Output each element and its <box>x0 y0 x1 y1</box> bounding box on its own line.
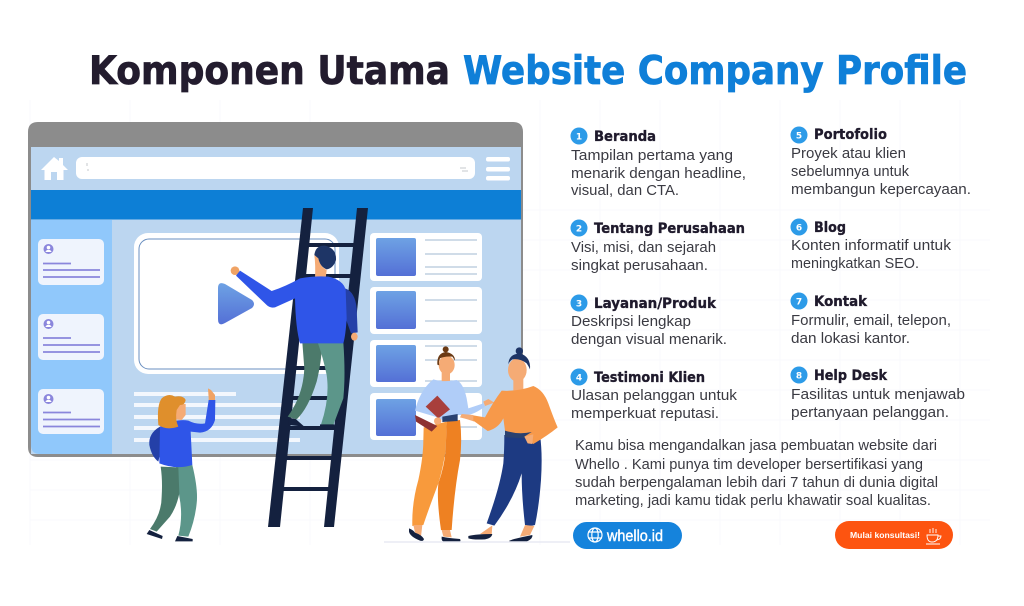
item 8: Help Desk: Fasilitas untuk menjawab <box>791 386 965 403</box>
title <box>89 49 967 94</box>
item 6: Blog: 6 <box>796 224 802 234</box>
item 4: Testimoni Klien: memperkuat reputasi. <box>571 405 719 422</box>
search bar <box>76 157 475 179</box>
button: Mulai konsultasi: Mulai konsultasi! <box>850 530 920 540</box>
icon: play <box>218 283 254 324</box>
item 4: Testimoni Klien: Testimoni Klien <box>594 370 705 386</box>
item 8: Help Desk: Help Desk <box>814 368 888 384</box>
woman with folder <box>409 346 494 542</box>
item 2: Tentang Perusahaan <box>570 220 745 274</box>
two women talking <box>409 346 558 542</box>
icon: menu <box>486 157 510 180</box>
item 6: Blog: Konten informatif untuk <box>791 237 952 254</box>
item 1: Beranda: 1 <box>576 132 582 142</box>
item 8: Help Desk: pertanyaan pelanggan. <box>791 404 949 421</box>
button: Mulai konsultasi <box>835 521 953 549</box>
icon: coffee cup <box>926 528 941 544</box>
ground line <box>384 541 570 543</box>
item 8: Help Desk: 8 <box>796 372 802 382</box>
button: whello.id: whello.id <box>606 528 663 545</box>
closing paragraph <box>575 438 938 509</box>
item 7: Kontak: dan lokasi kantor. <box>791 330 910 347</box>
item 5: Portofolio: Proyek atau klien <box>791 145 906 162</box>
item 5: Portofolio <box>790 126 971 198</box>
item 3: Layanan/Produk: Deskripsi lengkap <box>571 313 691 330</box>
woman pointing <box>147 388 215 541</box>
item 2: Tentang Perusahaan: Tentang Perusahaan <box>594 221 745 237</box>
item 5: Portofolio: Portofolio <box>814 127 887 143</box>
item 5: Portofolio: membangun kepercayaan. <box>791 181 971 198</box>
item 1: Beranda: Tampilan pertama yang <box>571 147 733 164</box>
item 7: Kontak: Kontak <box>814 294 868 310</box>
item 5: Portofolio: sebelumnya untuk <box>791 163 909 180</box>
item 1: Beranda: Beranda <box>594 129 656 145</box>
item 3: Layanan/Produk: dengan visual menarik. <box>571 331 727 348</box>
item 2: Tentang Perusahaan: Visi, misi, dan sejarah <box>571 239 716 256</box>
item 6: Blog: meningkatkan SEO. <box>791 255 919 272</box>
video player <box>134 233 339 374</box>
woman in orange <box>460 347 558 542</box>
title: Komponen Utama <box>89 49 450 94</box>
item 5: Portofolio: 5 <box>796 132 802 142</box>
title: Website Company Profile <box>463 49 967 94</box>
content cards <box>370 233 482 440</box>
closing paragraph: sudah berpengalaman lebih dari 7 tahun di dunia digital <box>575 475 938 491</box>
item 3: Layanan/Produk: Layanan/Produk <box>594 296 717 312</box>
item 2: Tentang Perusahaan: 2 <box>576 224 582 234</box>
item 6: Blog: Blog <box>814 220 846 236</box>
text lines <box>134 394 300 440</box>
button: whello.id <box>573 522 682 549</box>
item 6: Blog <box>790 218 952 272</box>
item 4: Testimoni Klien: Ulasan pelanggan untuk <box>571 387 738 404</box>
item 3: Layanan/Produk: 3 <box>576 300 582 310</box>
item 4: Testimoni Klien: 4 <box>576 374 582 384</box>
item 1: Beranda: menarik dengan headline, <box>571 165 746 182</box>
item 3: Layanan/Produk <box>570 294 727 348</box>
closing paragraph: Kamu bisa mengandalkan jasa pembuatan website dari <box>575 438 937 454</box>
item 7: Kontak: 7 <box>796 298 802 308</box>
item 2: Tentang Perusahaan: singkat perusahaan. <box>571 257 708 274</box>
sidebar profile cards <box>38 239 104 434</box>
item 7: Kontak <box>790 292 951 347</box>
browser window illustration <box>28 122 523 457</box>
icon: globe <box>588 528 602 542</box>
item 8: Help Desk <box>790 366 965 421</box>
item 1: Beranda <box>570 128 746 199</box>
item 7: Kontak: Formulir, email, telepon, <box>791 312 951 329</box>
item 1: Beranda: visual, dan CTA. <box>571 182 679 199</box>
item 4: Testimoni Klien <box>570 368 738 422</box>
closing paragraph: Whello . Kami punya tim developer bersertifikasi yang <box>575 457 923 473</box>
icon: home <box>41 157 68 180</box>
person on ladder <box>231 246 358 429</box>
closing paragraph: marketing, jadi kamu tidak perlu khawatir soal kualitas. <box>575 493 931 509</box>
ladder <box>268 208 368 527</box>
